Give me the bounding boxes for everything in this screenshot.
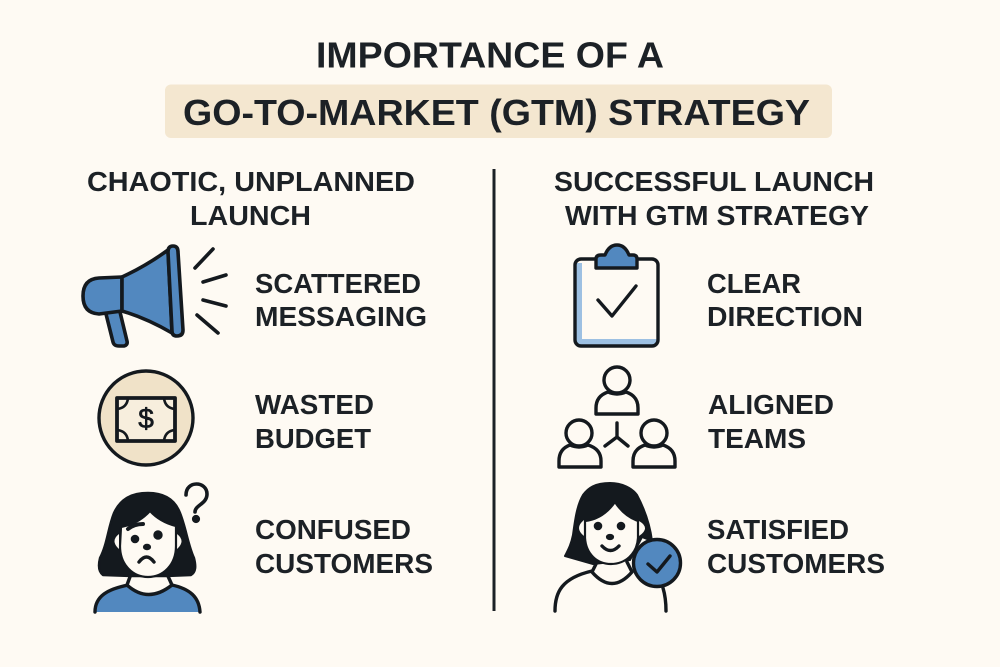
label: confused customers: CUSTOMERS [255, 548, 433, 579]
heading: successful launch: WITH GTM STRATEGY [565, 200, 869, 231]
icon: confused customer [95, 484, 207, 612]
label: aligned teams: TEAMS [708, 423, 806, 454]
heading: successful launch: SUCCESSFUL LAUNCH [554, 166, 874, 197]
label: satisfied customers [707, 514, 885, 579]
panel: chaotic launch [83, 166, 433, 612]
label: wasted budget [255, 389, 374, 454]
title: IMPORTANCE OF A [316, 34, 664, 76]
label: wasted budget: BUDGET [255, 423, 371, 454]
label: confused customers: CONFUSED [255, 514, 411, 545]
icon: megaphone [83, 246, 226, 346]
label: clear direction: CLEAR [707, 268, 801, 299]
icon: money coin [99, 371, 193, 465]
label: aligned teams: ALIGNED [708, 389, 834, 420]
label: clear direction: DIRECTION [707, 301, 863, 332]
label: scattered messaging [255, 268, 427, 332]
title [165, 34, 832, 138]
label: scattered messaging: MESSAGING [255, 301, 427, 332]
label: scattered messaging: SCATTERED [255, 268, 421, 299]
title: GO-TO-MARKET (GTM) STRATEGY [183, 92, 810, 133]
label: satisfied customers: SATISFIED [707, 514, 849, 545]
panel: successful launch [554, 166, 885, 611]
label: aligned teams [708, 389, 834, 454]
label: satisfied customers: CUSTOMERS [707, 548, 885, 579]
icon: money coin: $ [138, 403, 154, 434]
heading: chaotic launch: LAUNCH [190, 200, 311, 231]
label: confused customers [255, 514, 433, 579]
heading: chaotic launch: CHAOTIC, UNPLANNED [87, 166, 415, 197]
label: wasted budget: WASTED [255, 389, 374, 420]
icon: clipboard with check [575, 245, 658, 346]
icon: aligned team [559, 367, 675, 467]
icon: satisfied customer [555, 483, 680, 611]
label: clear direction [707, 268, 863, 332]
heading: chaotic launch [87, 166, 415, 231]
heading: successful launch [554, 166, 874, 231]
